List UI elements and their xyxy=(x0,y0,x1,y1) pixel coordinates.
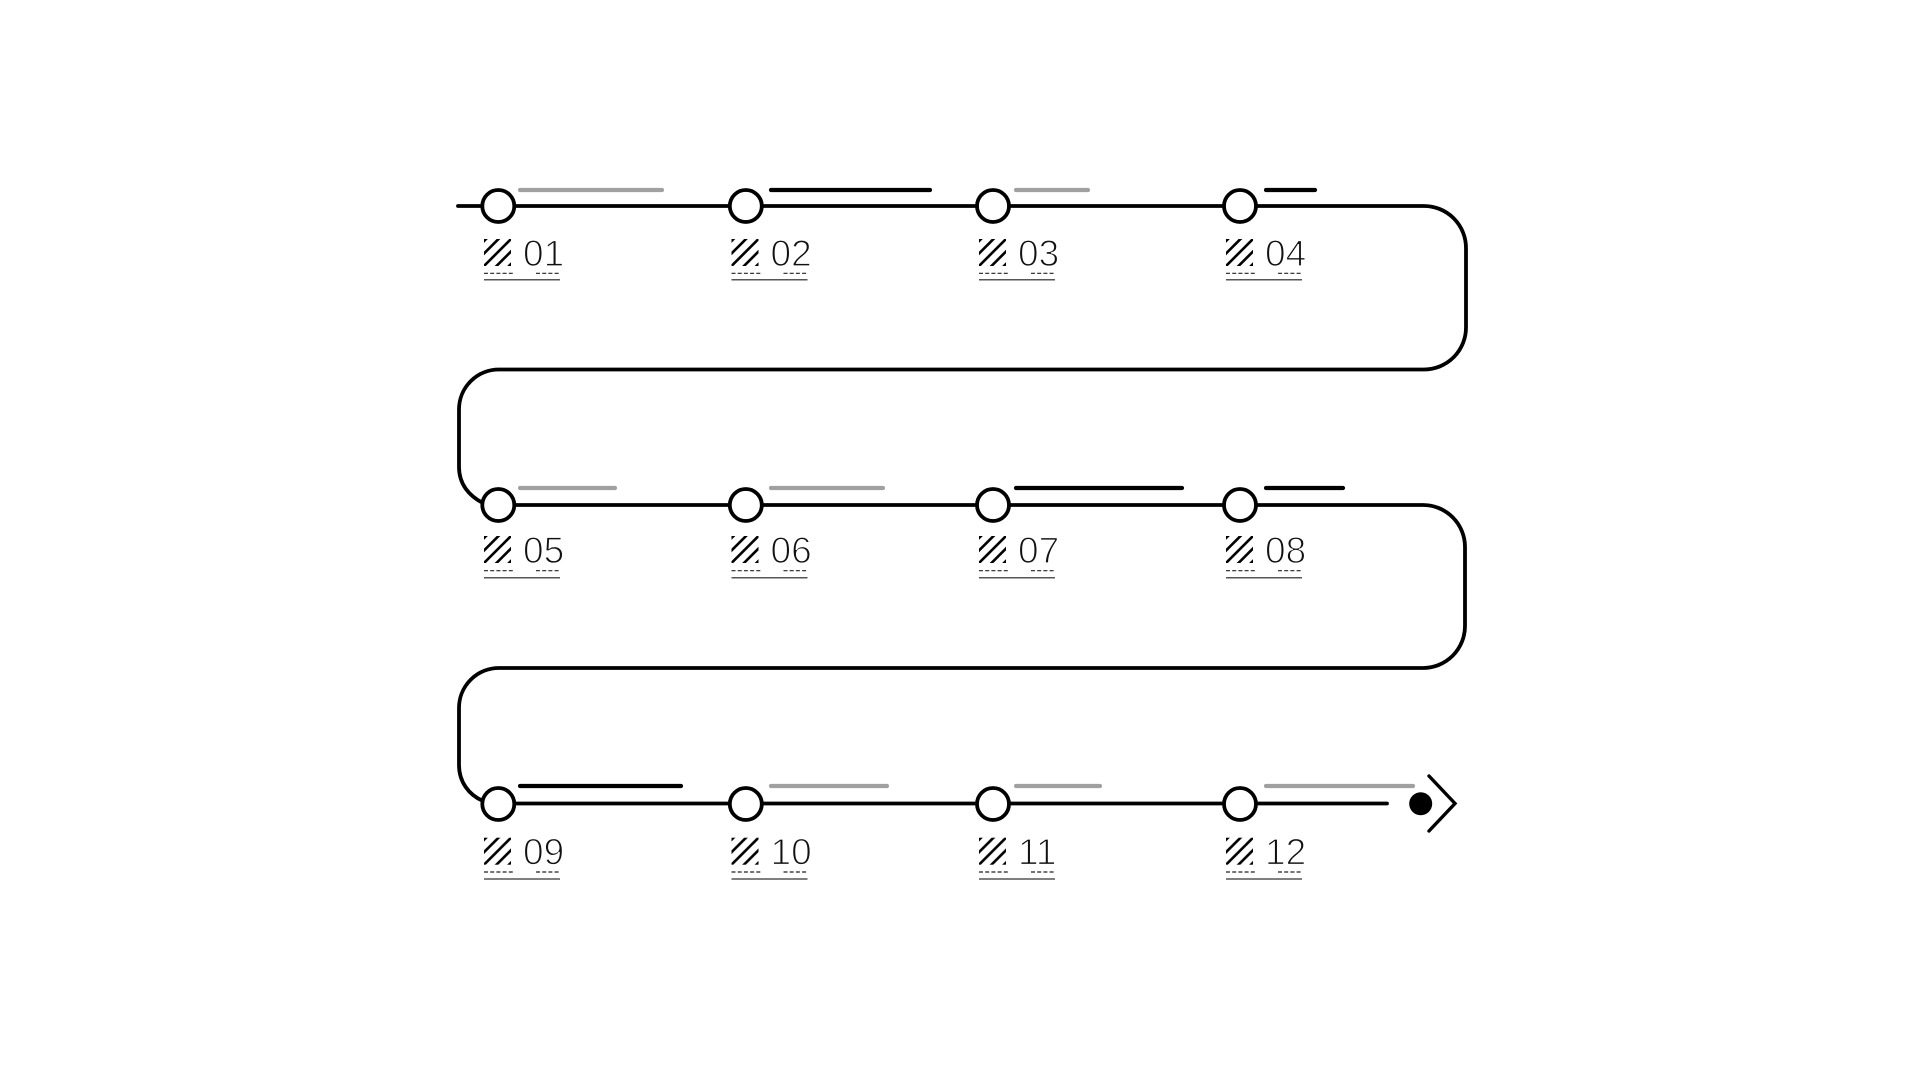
end marker: dot and chevron arrow xyxy=(1409,776,1455,831)
node xyxy=(730,489,762,521)
bar xyxy=(1266,784,1413,788)
label: 12 xyxy=(1265,832,1306,873)
label: 09 xyxy=(523,832,564,873)
node xyxy=(730,190,762,222)
step 11 xyxy=(977,786,1100,879)
node xyxy=(730,788,762,820)
node xyxy=(482,788,514,820)
node xyxy=(977,190,1009,222)
node xyxy=(1224,788,1256,820)
step 01 xyxy=(482,190,662,280)
label: 11 xyxy=(1018,832,1056,873)
label: 08 xyxy=(1265,530,1306,571)
node xyxy=(1224,190,1256,222)
step 06 xyxy=(730,488,883,578)
label: 04 xyxy=(1265,233,1306,274)
node xyxy=(977,489,1009,521)
bar xyxy=(1266,188,1315,192)
node xyxy=(1224,489,1256,521)
step 03 xyxy=(977,190,1088,280)
label xyxy=(979,530,1059,578)
label xyxy=(732,832,812,879)
step 04 xyxy=(1224,190,1315,280)
bar xyxy=(771,486,883,490)
label: 01 xyxy=(523,233,564,274)
bar xyxy=(771,784,887,788)
label xyxy=(732,530,812,578)
label: 06 xyxy=(770,530,812,571)
label: 02 xyxy=(770,233,812,274)
node xyxy=(977,788,1009,820)
bar xyxy=(520,486,615,490)
bar xyxy=(1016,784,1100,788)
step 09 xyxy=(482,786,681,879)
step 05 xyxy=(482,488,615,578)
step 12 xyxy=(1224,786,1413,879)
bar xyxy=(520,784,681,788)
serpentine path line xyxy=(458,206,1466,804)
label xyxy=(732,233,812,280)
step 10 xyxy=(730,786,887,879)
bar xyxy=(1016,188,1088,192)
label: 03 xyxy=(1018,233,1059,274)
step 02 xyxy=(730,190,930,280)
step 08 xyxy=(1224,488,1343,578)
label xyxy=(484,832,564,879)
label: 07 xyxy=(1018,530,1059,571)
node xyxy=(482,489,514,521)
node xyxy=(482,190,514,222)
step 07 xyxy=(977,488,1182,578)
bar xyxy=(520,188,662,192)
label: 05 xyxy=(523,530,564,571)
label xyxy=(1226,832,1306,879)
label xyxy=(484,233,564,280)
label: 10 xyxy=(770,832,812,873)
bar xyxy=(771,188,930,192)
bar xyxy=(1266,486,1343,490)
bar xyxy=(1016,486,1182,490)
